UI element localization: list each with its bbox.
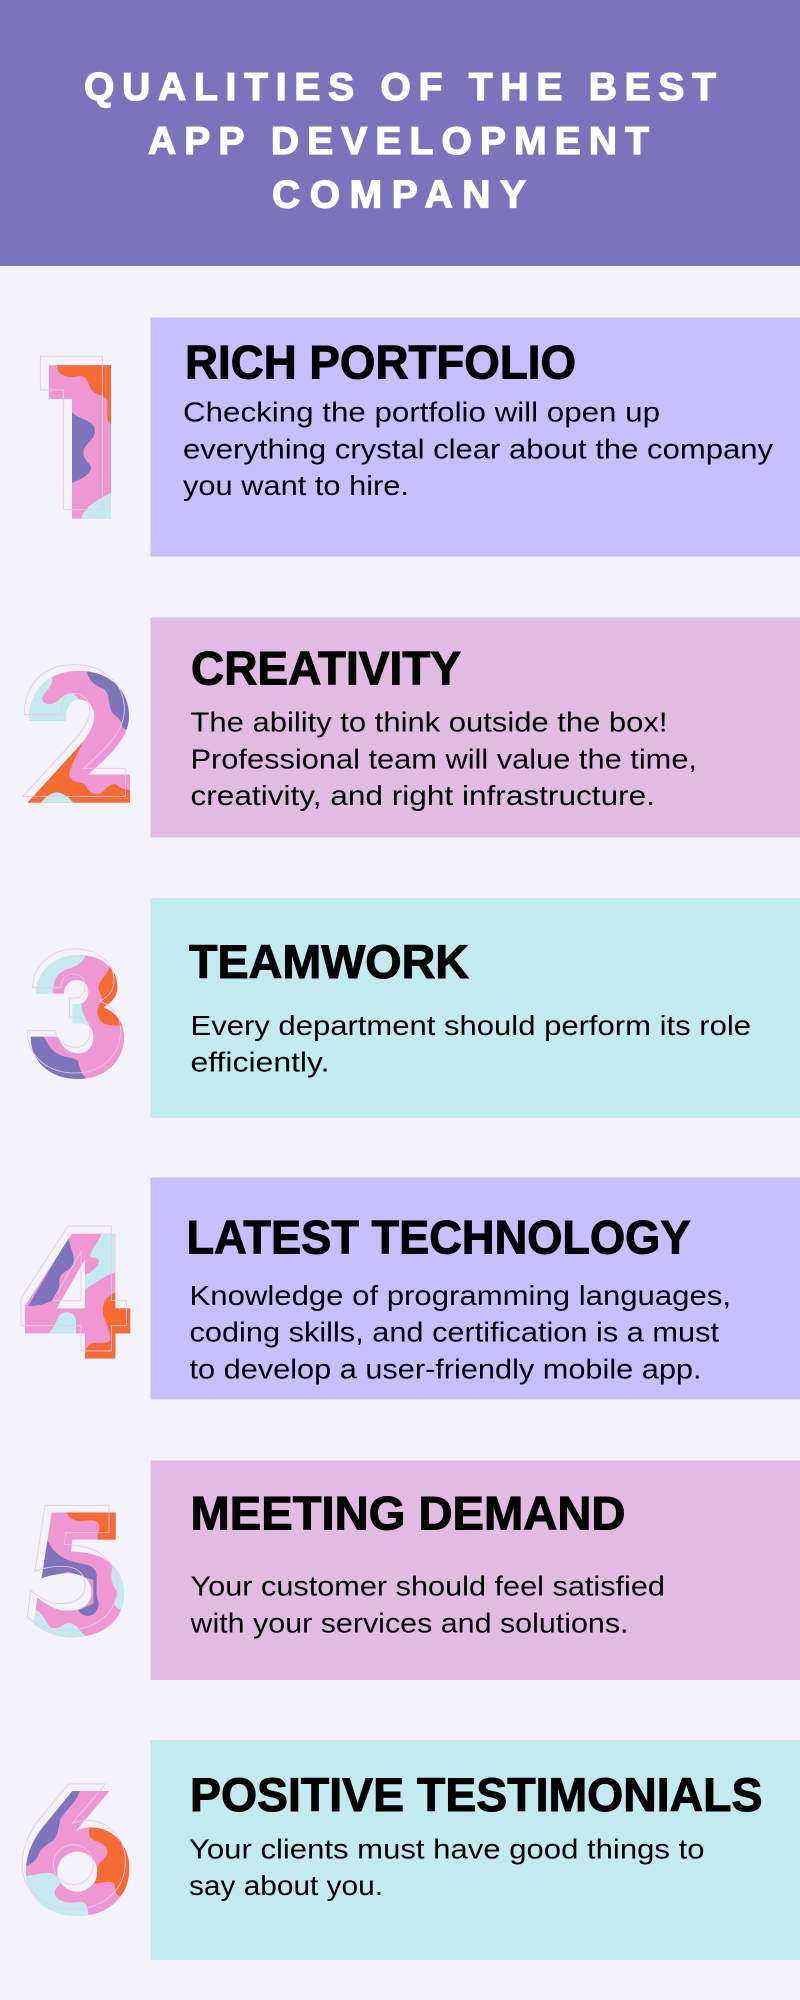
title: APP DEVELOPMENT bbox=[148, 120, 649, 163]
text: rich portfolio description: everything crystal clear about the company bbox=[183, 433, 773, 464]
text: meeting demand description bbox=[189, 1571, 665, 1638]
number 5 icon bbox=[27, 1505, 130, 1643]
panel: creativity bbox=[150, 618, 800, 838]
text: meeting demand description: Your customer should feel satisfied bbox=[190, 1571, 665, 1602]
number 2 icon bbox=[22, 664, 130, 803]
text: rich portfolio description: Checking the portfolio will open up bbox=[183, 397, 660, 428]
text: latest technology description: to develop a user-friendly mobile app. bbox=[190, 1353, 702, 1384]
number 6 icon bbox=[20, 1784, 133, 1920]
text: positive testimonials description: say about you. bbox=[189, 1870, 383, 1901]
heading: positive testimonials: POSITIVE TESTIMONIALS bbox=[190, 1768, 762, 1821]
text: rich portfolio description bbox=[183, 397, 773, 501]
text: meeting demand description: with your services and solutions. bbox=[189, 1607, 628, 1638]
text: positive testimonials description: Your clients must have good things to bbox=[189, 1833, 704, 1864]
text: rich portfolio description: you want to hire. bbox=[183, 470, 409, 501]
text: creativity description: creativity, and right infrastructure. bbox=[190, 780, 655, 811]
heading: creativity: CREATIVITY bbox=[191, 642, 461, 694]
text: teamwork description: efficiently. bbox=[190, 1047, 330, 1078]
panel: teamwork bbox=[150, 898, 800, 1118]
text: creativity description bbox=[190, 707, 697, 811]
text: latest technology description: coding skills, and certification is a must bbox=[190, 1317, 719, 1348]
heading: latest technology: LATEST TECHNOLOGY bbox=[186, 1210, 690, 1264]
text: latest technology description: Knowledge of programming languages, bbox=[190, 1280, 731, 1311]
title bbox=[84, 66, 716, 217]
heading: teamwork: TEAMWORK bbox=[189, 935, 469, 988]
panel: meeting demand bbox=[150, 1460, 800, 1680]
text: latest technology description bbox=[190, 1280, 731, 1384]
heading: rich portfolio: RICH PORTFOLIO bbox=[185, 336, 576, 388]
text: teamwork description bbox=[190, 1010, 751, 1078]
heading: meeting demand: MEETING DEMAND bbox=[190, 1486, 626, 1540]
number 4 icon bbox=[20, 1226, 133, 1363]
header band bbox=[0, 0, 800, 266]
text: creativity description: The ability to think outside the box! bbox=[190, 707, 668, 738]
title: QUALITIES OF THE BEST bbox=[84, 66, 716, 109]
text: creativity description: Professional team will value the time, bbox=[190, 743, 697, 774]
number 1 icon bbox=[40, 356, 111, 519]
panel: rich portfolio bbox=[150, 318, 800, 556]
text: positive testimonials description bbox=[189, 1833, 704, 1901]
title: COMPANY bbox=[272, 174, 526, 217]
panel: latest technology bbox=[150, 1178, 800, 1400]
number 3 icon bbox=[27, 948, 124, 1079]
panel: positive testimonials bbox=[150, 1740, 800, 1960]
text: teamwork description: Every department should perform its role bbox=[190, 1010, 751, 1041]
